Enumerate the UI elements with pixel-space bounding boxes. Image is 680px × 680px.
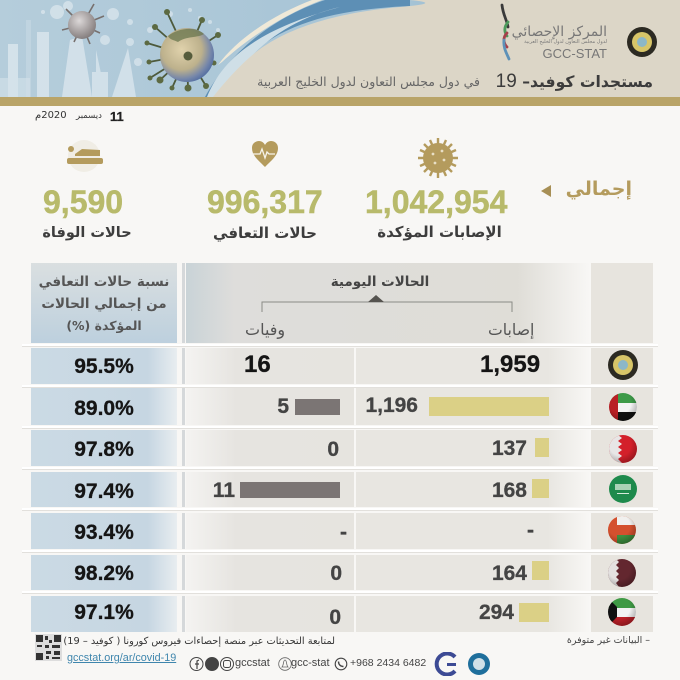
flag: Kuwait (608, 598, 636, 626)
row: Oman (31, 513, 653, 549)
cases bar (519, 603, 549, 622)
row: Bahrain (31, 430, 653, 466)
cases bar (532, 561, 549, 580)
icon: whatsapp (334, 658, 348, 670)
flag: Saudi Arabia (609, 475, 637, 503)
deaths: 0 (330, 562, 342, 585)
icon: snapchat (278, 657, 292, 671)
value: 9,590 (43, 184, 123, 220)
logo text (512, 24, 607, 61)
social icons (190, 657, 234, 671)
cases bar (535, 438, 549, 457)
center name: المركز الإحصائي (512, 24, 607, 40)
month: ديسمبر (76, 111, 102, 121)
cases: 137 (492, 437, 527, 460)
total word: إجمالي (566, 178, 632, 200)
link: gccstat.org/ar/covid-19 (67, 652, 176, 664)
deaths: 5 (277, 395, 289, 418)
stat: deaths (42, 140, 132, 241)
gold strip (0, 97, 680, 106)
bokeh circles (41, 1, 220, 66)
recovery rate: 95.5% (74, 355, 134, 378)
arrow (541, 185, 551, 197)
deaths bar (240, 482, 340, 498)
sky background (0, 0, 680, 97)
bracket (262, 295, 512, 312)
header: recovery rate: من إجمالي الحالات (41, 296, 167, 312)
recovery rate: 93.4% (74, 521, 134, 544)
daily cases title: الحالات اليومية (331, 274, 429, 290)
GCC emblem (627, 27, 657, 57)
recovery rate: 97.4% (74, 480, 134, 503)
recovery rate: 98.2% (74, 562, 134, 585)
cases column heading: إصابات (488, 320, 534, 339)
header: recovery rate: المؤكدة (%) (66, 318, 142, 333)
center subtitle: لدول مجلس التعاون لدول الخليج العربية (524, 39, 607, 45)
QR code (35, 634, 62, 661)
cases: - (527, 519, 534, 542)
table header (31, 263, 653, 343)
row: Saudi Arabia (31, 472, 653, 507)
flag: GCC (608, 350, 638, 380)
value: 1,042,954 (365, 184, 507, 220)
subtitle: في دول مجلس التعاون لدول الخليج العربية (257, 74, 480, 89)
icon: bed (67, 140, 103, 172)
title: مستجدات كوفيد– 19 (496, 71, 653, 92)
flag: Bahrain (609, 435, 637, 463)
curved swoosh (205, 0, 410, 97)
handle gcc-stat: gcc-stat (291, 657, 330, 669)
GCC-STAT name: GCC-STAT (542, 46, 607, 61)
icon: virus (418, 138, 458, 178)
logo: ISO G (434, 652, 456, 676)
stat: recovered (207, 141, 323, 242)
skyline (0, 20, 136, 97)
label: حالات الوفاة (42, 225, 132, 241)
deaths column heading: وفيات (245, 320, 285, 339)
cases bar (429, 397, 549, 416)
deaths bar (295, 399, 340, 415)
virus ball (62, 4, 104, 44)
cases: 1,959 (480, 351, 540, 378)
cases: 1,196 (365, 394, 418, 417)
handle gccstat: gccstat (235, 657, 270, 669)
footer (35, 634, 650, 676)
cases: 294 (479, 601, 514, 624)
value: 996,317 (207, 184, 323, 220)
label: الإصابات المؤكدة (377, 223, 502, 241)
day: 11 (110, 109, 124, 124)
flag: Oman (608, 516, 636, 544)
GCC-STAT ribbon (502, 5, 509, 59)
total label (541, 178, 632, 200)
header: recovery rate: نسبة حالات التعافي (39, 274, 169, 290)
icon: heart (252, 141, 278, 167)
row: Qatar (31, 555, 653, 590)
header banner (0, 0, 680, 106)
cases: 168 (492, 479, 527, 502)
cases: 164 (492, 562, 527, 585)
data not available note: – البيانات غير متوفرة (567, 635, 650, 646)
cases bar (532, 479, 549, 498)
stat: confirmed (365, 138, 508, 241)
header: recovery rate (31, 263, 177, 343)
follow text: لمتابعة التحديثات عبر منصة إحصاءات فيروس كورونا ( كوفيد – 19) (63, 636, 335, 647)
year: 2020م (35, 110, 67, 121)
deaths: - (340, 521, 347, 544)
flag: Qatar (608, 559, 636, 587)
deaths: 0 (329, 606, 341, 629)
recovery rate: 97.8% (74, 438, 134, 461)
flag: UAE (609, 393, 637, 421)
beige panel (213, 0, 680, 97)
label: حالات التعافي (213, 224, 317, 242)
date (35, 109, 124, 124)
row: UAE (31, 388, 653, 425)
row: GCC (31, 348, 653, 384)
recovery rate: 97.1% (74, 601, 134, 624)
header: daily cases (186, 263, 590, 343)
logo: TUV (468, 653, 490, 675)
phone: +968 2434 6482 (350, 657, 426, 669)
recovery rate: 89.0% (74, 397, 134, 420)
globe virus (144, 9, 221, 92)
deaths: 0 (327, 438, 339, 461)
row: Kuwait (31, 596, 653, 632)
deaths: 16 (244, 351, 271, 378)
deaths: 11 (213, 479, 235, 502)
